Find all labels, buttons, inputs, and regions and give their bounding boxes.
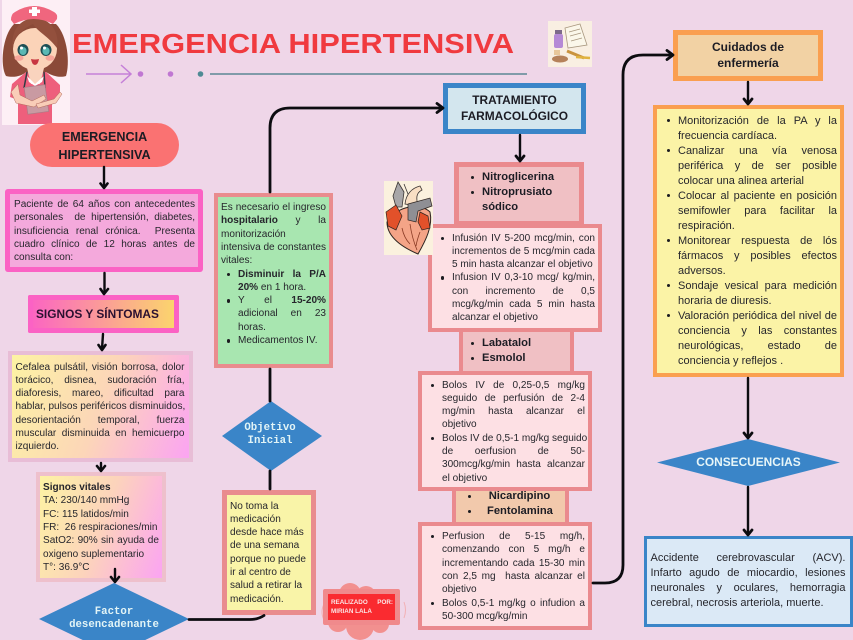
nursing care list text: Valoración periódica del nivel de <box>678 310 837 322</box>
hospital admission goals list: Disminuir la P/A <box>238 268 326 280</box>
arrow: perfusion box to nursing care <box>593 50 673 583</box>
nitroglycerin drug list: Nitroprusiato <box>482 186 552 198</box>
treatment heading text <box>461 93 568 123</box>
labetalol dosing text <box>431 380 587 484</box>
no medication text: No toma la <box>230 500 279 512</box>
labetalol dosing text: Bolos IV de 0,25-0,5 mg/kg <box>442 380 585 390</box>
patient case text: cuadro clínico de 12 horas antes de <box>14 239 195 250</box>
arrow: pill to case <box>100 167 108 188</box>
nursing care list text: semifowler para facilitar la <box>678 205 837 217</box>
hospital admission goals list: Y el 15-20% <box>238 295 326 306</box>
nursing care list text: neurológicas, estado de <box>678 340 837 352</box>
hospital admission goals list: adicional en 23 <box>238 308 326 319</box>
hospital admission goals list: 20% en 1 hora. <box>238 282 306 293</box>
arrow: treatment to nitroglycerin <box>516 135 524 161</box>
patient case text: consulta con: <box>14 252 73 263</box>
symptoms text: muscular disminuida en hemicuerpo <box>16 428 184 439</box>
symptoms text: izquierdo. <box>16 441 59 452</box>
panel: labetalol drugs <box>459 332 574 372</box>
title: EMERGENCIA HIPERTENSIVA <box>72 28 514 59</box>
hospital admission goals list: horas. <box>238 322 266 333</box>
nitroglycerin dosing text: mcg/kg/min cada 5 min hasta <box>452 299 595 310</box>
labetalol dosing text: objetivo <box>442 419 477 430</box>
vital signs text: SatO2: 90% sin ayuda de <box>43 535 159 546</box>
hospital admission goals list <box>227 268 326 346</box>
nicardipine dosing text: Bolos 0,5-1 mg/kg o infudion a <box>442 598 585 609</box>
symptoms text <box>16 362 185 452</box>
nursing care list text: adversos. <box>678 265 726 277</box>
nursing care list text: conciencia y reflejos . <box>678 355 783 367</box>
vital signs text: FC: 115 latidos/min <box>43 509 129 520</box>
nursing care list text: conciencia y las constantes <box>678 325 837 337</box>
labetalol dosing text: el objetivo <box>442 473 487 484</box>
nicardipine dosing text: 50-300 mcg/kg/min <box>442 611 527 622</box>
diamond shape <box>657 439 840 486</box>
nicardipine drug list <box>468 490 553 517</box>
nicardipine dosing text: comenzando con 5 mg/h e <box>442 544 585 555</box>
no medication text <box>230 500 306 605</box>
arrow: consequences to result box <box>744 487 752 535</box>
nitroglycerin dosing text: Infusion IV 0,3-10 mcg/ kg/min, <box>452 272 595 283</box>
labetalol dosing text: de oerfusion de 50- <box>442 446 585 457</box>
panel: labetalol dosing <box>418 371 592 491</box>
vital signs text: T°: 36.9°C <box>43 562 90 573</box>
labetalol dosing text: Bolos IV de 0,5-1 mg/kg seguido <box>442 433 587 444</box>
nicardipine dosing text: objetivo <box>442 584 477 595</box>
nitroglycerin dosing text: alcanzar el objetivo <box>452 312 538 323</box>
nitroglycerin dosing text: 5 min hasta alcanzar el objetivo <box>452 259 593 270</box>
nitroglycerin dosing text: con incremento de 0,5 <box>452 286 595 297</box>
diamond shape <box>39 583 188 640</box>
vital signs text: Signos vitales <box>43 482 111 493</box>
nursing care heading text: Cuidados de <box>712 40 784 54</box>
nitroglycerin drug list: Nitroglicerina <box>482 170 554 182</box>
arrow: care list to consequences <box>744 378 752 438</box>
nitroglycerin dosing text: incrementos de 5 mcg/min cada <box>452 246 595 257</box>
panel: nicardipine drugs <box>452 491 569 522</box>
badge text <box>331 598 393 614</box>
panel: nitroglycerin drugs <box>454 162 584 226</box>
nursing care list text: fármacos y posibles efectos <box>678 250 837 262</box>
connector: objective to no medication box <box>269 471 271 489</box>
vital signs text: FR: 26 respiraciones/min <box>43 522 157 533</box>
no medication text: medicación. <box>230 594 284 605</box>
icon: nurse illustration <box>2 0 70 125</box>
no medication text: ir al centro de <box>230 567 291 578</box>
hospital admission text: hospitalario y la <box>221 215 326 226</box>
nursing care list text: colocar una alinea arterial <box>678 175 804 187</box>
nursing care heading text <box>712 40 784 70</box>
vital signs text <box>43 482 159 573</box>
consequences detail text: Accidente cerebrovascular (ACV). <box>650 552 846 564</box>
nursing care list text: Sondaje vesical para medición <box>678 280 837 292</box>
nitroglycerin drug list: sódico <box>482 200 518 212</box>
nursing care list text: Monitorización de la PA y la <box>678 115 837 127</box>
nursing care list text: respiración. <box>678 220 735 232</box>
initial objective label <box>244 422 296 447</box>
labetalol drug list <box>471 336 531 364</box>
nursing care list text: Canalizar una vía venosa <box>678 145 837 157</box>
labetalol dosing text: mg/min hasta alcanzar el <box>442 406 585 417</box>
hospital admission text: Es necesario el ingreso <box>221 202 326 213</box>
initial objective label: Inicial <box>248 435 292 447</box>
nursing care list text: horaria de diuresis. <box>678 295 772 307</box>
no medication text: desde hace más <box>230 527 304 538</box>
no medication text: de una semana <box>230 540 299 551</box>
icon: medication and clipboard <box>548 21 592 67</box>
treatment heading text: FARMACOLÓGICO <box>461 109 568 123</box>
frame of signs heading <box>28 295 179 333</box>
panel: signs and symptoms heading <box>28 295 179 333</box>
panel: patient case <box>5 189 203 272</box>
diamond shape <box>222 401 322 471</box>
diamond: initial objective <box>222 401 322 471</box>
nicardipine dosing text: Perfusion de 5-15 mg/h, <box>442 531 585 542</box>
hospital admission goals list: Medicamentos IV. <box>238 335 318 346</box>
decorative arrow with dots under title <box>86 64 527 84</box>
badge cloud background <box>322 583 406 640</box>
pill heading text: EMERGENCIA <box>62 130 147 144</box>
panel: hospital admission <box>214 193 333 368</box>
consequences detail text: Infarto agudo de miocardio, lesiones <box>650 567 846 579</box>
signs heading text: SIGNOS Y SÍNTOMAS <box>36 306 159 320</box>
vital signs text: TA: 230/140 mmHg <box>43 495 129 506</box>
arrow: symptoms to vital signs <box>97 463 105 471</box>
trigger factor label <box>69 606 159 631</box>
panel: no medication <box>222 490 316 615</box>
symptoms text: hablar, pulsos periféricos disminuidos, <box>16 401 185 412</box>
patient case text: insuficiencia renal crónica. Presenta <box>14 226 195 237</box>
panel: nicardipine dosing <box>418 522 592 630</box>
nursing care list text: frecuencia cardíaca. <box>678 130 777 142</box>
consequences detail text: cerebral, necrosis arteriola, muerte. <box>650 597 824 609</box>
nursing care heading text: enfermería <box>717 56 779 70</box>
nitroglycerin drug list <box>471 170 554 212</box>
arrow: vital signs to trigger factor <box>111 569 119 582</box>
arrow: nursing title to care list <box>744 82 752 104</box>
pill heading text <box>58 130 151 162</box>
diamond: consequences <box>657 439 840 486</box>
nitroglycerin dosing text: Infusión IV 5-200 mcg/min, con <box>452 232 595 244</box>
consequences detail text: neuronales y oculares, hemorragia <box>650 582 846 594</box>
symptoms text: Cefalea pulsátil, visión borrosa, dolor <box>16 362 184 372</box>
pill heading text: HIPERTENSIVA <box>58 148 151 162</box>
no medication text: porque no puede <box>230 554 306 565</box>
badge: author credit <box>322 583 406 640</box>
labetalol dosing text: seguido de perfusión de 2-4 <box>442 393 585 404</box>
nursing care list text <box>667 115 837 367</box>
icon: anatomical heart <box>384 181 433 255</box>
nursing care list text: periférica y de ser posible <box>678 160 837 172</box>
nicardipine dosing text: con 2,5 mg hasta alcanzar el <box>442 571 585 582</box>
badge red frame <box>323 589 400 625</box>
symptoms text: torácico, disnea, sudoración fría, <box>16 375 184 386</box>
nicardipine dosing text: incrementando cada 15-30 min <box>442 558 585 569</box>
initial objective label: Objetivo <box>244 422 296 434</box>
nitroglycerin dosing text <box>441 232 595 323</box>
arrow: green box to treatment <box>270 104 443 192</box>
patient case text: personales de hipertensión, diabetes, <box>14 212 195 223</box>
consequences label: CONSECUENCIAS <box>696 455 801 469</box>
hospital admission text: monitorización <box>221 229 286 240</box>
badge text: MIRIAN LALA <box>331 608 372 614</box>
arrow: signs to symptoms <box>98 334 106 350</box>
badge text: REALIZADO POR: <box>331 598 393 606</box>
panel: consequences detail <box>644 536 853 627</box>
vital signs text: oxigeno suplementario <box>43 549 144 560</box>
nicardipine drug list: Fentolamina <box>487 505 553 517</box>
nicardipine drug list: Nicardipino <box>489 490 550 502</box>
trigger factor label: desencadenante <box>69 619 159 631</box>
hospital admission text: intensiva de constantes <box>221 242 326 253</box>
no medication text: salud a retirar la <box>230 580 302 591</box>
panel: treatment heading <box>443 83 586 134</box>
patient case text: Paciente de 64 años con antecedentes <box>14 199 195 210</box>
hospital admission text: vitales: <box>221 255 252 266</box>
labetalol drug list: Esmolol <box>482 352 526 364</box>
nicardipine dosing text <box>431 531 585 622</box>
trigger factor label: Factor <box>95 606 133 618</box>
symptoms text: diaforesis, mareo, dificultad para <box>16 388 184 399</box>
diamond: trigger factor <box>39 583 188 640</box>
labetalol dosing text: 300mcg/kg/min hasta alcanzar <box>442 459 585 470</box>
hospital admission text <box>221 202 326 266</box>
arrow: case to signs <box>100 273 108 294</box>
labetalol drug list: Labatalol <box>482 336 531 348</box>
panel: vital signs <box>36 472 166 582</box>
heading pill: emergencia hipertensiva <box>30 123 179 167</box>
patient case text <box>14 199 195 263</box>
panel: nitroglycerin dosing <box>428 224 602 332</box>
connector: trigger factor to no medication box <box>189 616 264 620</box>
symptoms text: desorientación temporal, fuerza <box>16 415 184 426</box>
panel: nursing care list <box>653 105 844 377</box>
connector: green box to objective <box>269 369 271 401</box>
consequences detail text <box>650 552 846 609</box>
panel: symptoms list <box>8 351 193 462</box>
no medication text: medicación <box>230 514 281 525</box>
treatment heading text: TRATAMIENTO <box>472 93 557 107</box>
panel: nursing care heading <box>673 30 823 81</box>
nursing care list text: Colocar al paciente en posición <box>678 190 837 202</box>
nursing care list text: Monitorear respuesta de lós <box>678 235 837 247</box>
